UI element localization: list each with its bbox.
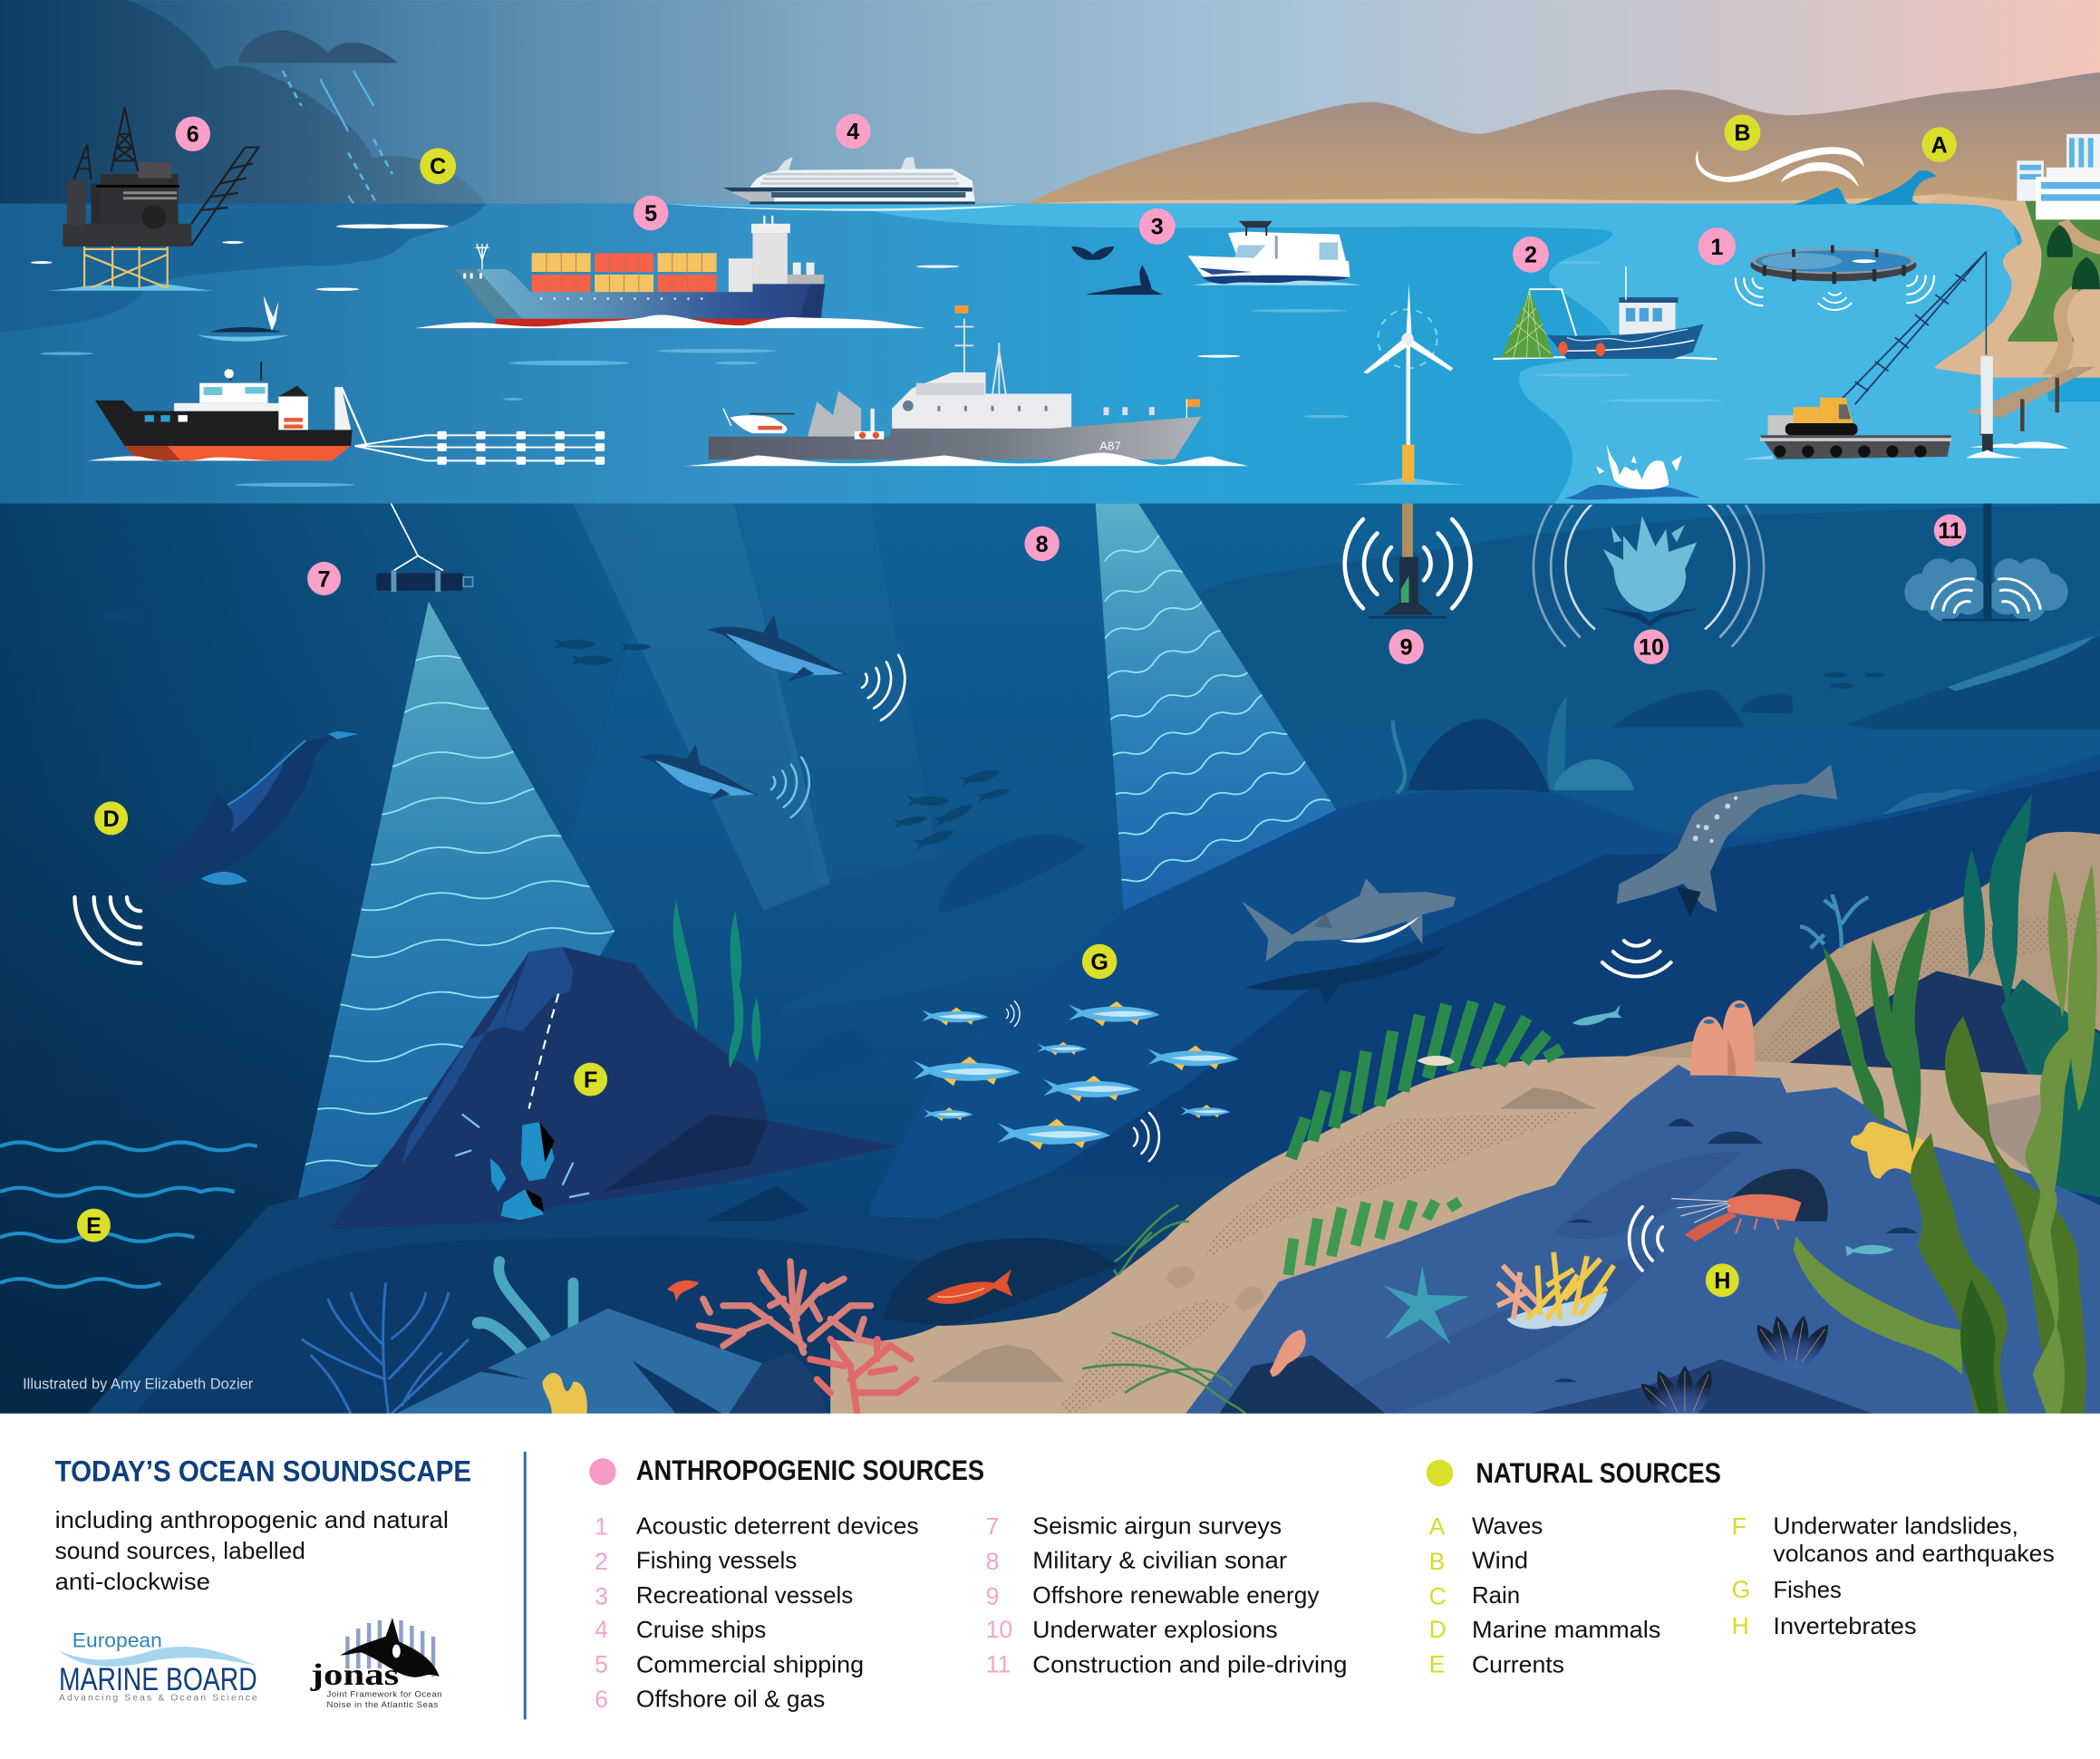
anthropogenic sources legend: 7 xyxy=(986,1513,999,1540)
logo: JONAS: jonas xyxy=(310,1658,399,1692)
marker E xyxy=(77,1209,111,1242)
natural sources legend: C xyxy=(1429,1582,1447,1609)
natural sources legend: D xyxy=(1429,1616,1447,1643)
small teal fish xyxy=(1845,1245,1893,1256)
marker B xyxy=(1725,114,1760,150)
dolphin lower xyxy=(639,744,759,801)
marker 10: 10 xyxy=(1639,635,1664,661)
anthropogenic sources legend: Fishing vessels xyxy=(636,1548,797,1573)
source 10: underwater explosion xyxy=(1532,505,1766,647)
small red fish xyxy=(667,1281,699,1301)
seagrass fan upper xyxy=(1291,1001,1562,1158)
main sand dune xyxy=(830,1057,2049,1414)
shrimp xyxy=(1671,1194,1801,1242)
beach strip xyxy=(1024,194,2009,214)
marker C xyxy=(420,148,456,184)
natural sources legend: Rain xyxy=(1472,1583,1520,1609)
source 7: seismic pulse beam xyxy=(297,602,615,1198)
legend intro xyxy=(55,1508,449,1595)
rain puddles xyxy=(336,224,449,228)
marker B: B xyxy=(1734,121,1751,146)
natural sources legend: H xyxy=(1732,1612,1749,1639)
anthropogenic sources legend: Military & civilian sonar xyxy=(1032,1548,1287,1573)
whale tail and fin xyxy=(1071,246,1163,295)
marker 3 xyxy=(1139,208,1176,245)
anthropogenic sources legend: Seismic airgun surveys xyxy=(1032,1514,1282,1540)
marker 5: 5 xyxy=(644,201,657,227)
whale sound waves xyxy=(61,871,167,977)
marker 9: 9 xyxy=(1400,635,1413,661)
marker G: G xyxy=(1090,950,1108,975)
distant rocks xyxy=(1612,690,1794,727)
logo: European Marine Board: Advancing Seas & Ocean Science xyxy=(59,1694,257,1704)
source 6: offshore oil and gas platform xyxy=(47,107,258,291)
marker 7 xyxy=(307,562,341,595)
marker G xyxy=(1082,944,1117,979)
source 1: fish cage with deterrent device xyxy=(1730,245,1940,311)
dolphin lower sound waves xyxy=(767,753,814,819)
source E: currents xyxy=(0,1142,257,1287)
surface splash xyxy=(1564,445,1701,499)
marker E: E xyxy=(86,1213,102,1239)
marker 5 xyxy=(634,196,668,230)
reef bumps xyxy=(1553,1119,1918,1382)
source B: wind swirl xyxy=(1696,147,1864,188)
anthropogenic sources legend: 3 xyxy=(595,1582,608,1609)
legend intro: anti-clockwise xyxy=(55,1570,210,1595)
source A: breaking waves xyxy=(1792,170,1937,205)
blue reef xyxy=(1185,1065,2100,1414)
source 7: airgun array xyxy=(376,504,473,592)
lower seabed band xyxy=(936,770,2100,1414)
airgun streamers xyxy=(355,431,605,465)
marker 1 xyxy=(1698,227,1736,266)
source 9: turbine foundation with sound xyxy=(1345,504,1470,617)
source 5: container ship xyxy=(415,216,925,328)
foreground blue rock xyxy=(395,1309,827,1414)
source 8: naval research vessel: A87 xyxy=(1099,440,1121,453)
reef cave xyxy=(1727,1169,1828,1222)
marker 3: 3 xyxy=(1151,215,1164,240)
mussels lower cluster xyxy=(1635,1366,1718,1426)
marker 11 xyxy=(1934,514,1966,546)
marker 1: 1 xyxy=(1710,235,1723,260)
anthropogenic sources legend: ANTHROPOGENIC SOURCES xyxy=(636,1455,984,1486)
marker 10 xyxy=(1634,630,1669,664)
teal rock xyxy=(2001,979,2100,1197)
source 11: construction barge and crane xyxy=(1741,252,2022,459)
distant fish silhouettes xyxy=(102,607,1886,851)
anthropogenic sources legend: 9 xyxy=(986,1582,999,1609)
anthropogenic sources legend: 2 xyxy=(595,1548,608,1575)
teal fish on slope xyxy=(1573,1004,1621,1025)
deep water xyxy=(0,504,2100,1414)
sand rock xyxy=(931,1345,1065,1382)
natural sources legend: Marine mammals xyxy=(1472,1618,1660,1643)
anthropogenic sources legend: Acoustic deterrent devices xyxy=(636,1514,919,1540)
rain xyxy=(283,71,392,225)
shoal of fish xyxy=(914,1001,1239,1150)
marker H: H xyxy=(1714,1269,1730,1294)
yellow sponge small xyxy=(542,1373,587,1414)
natural sources legend: Wind xyxy=(1472,1548,1528,1573)
whitecaps xyxy=(31,241,1240,358)
marker F xyxy=(574,1063,607,1097)
anthropogenic sources legend: Construction and pile-driving xyxy=(1032,1653,1348,1678)
divider xyxy=(524,1452,527,1719)
logo: European Marine Board: MARINE BOARD xyxy=(59,1661,257,1697)
sea surface xyxy=(0,204,2100,505)
anthropogenic sources legend: 4 xyxy=(595,1616,608,1643)
red fish xyxy=(927,1270,1012,1304)
seafloor foreground xyxy=(134,1205,1286,1414)
striped rock fans xyxy=(777,835,1088,1087)
anthropogenic sources legend: Offshore renewable energy xyxy=(1032,1583,1320,1609)
marker A: A xyxy=(1931,132,1948,158)
natural sources legend: Fishes xyxy=(1773,1578,1842,1603)
natural sources legend: G xyxy=(1732,1576,1750,1603)
natural sources legend: volcanos and earthquakes xyxy=(1773,1542,2055,1567)
pilot whale xyxy=(148,731,362,894)
logo: JONAS: Joint Framework for Ocean xyxy=(327,1689,442,1699)
legend panel xyxy=(0,1414,2100,1759)
legend intro: including anthropogenic and natural xyxy=(55,1508,449,1533)
marker 6: 6 xyxy=(187,122,199,148)
teal tube worms xyxy=(479,1261,573,1362)
left blue coral xyxy=(301,1283,469,1414)
seal sound waves xyxy=(1602,941,1671,977)
logo: JONAS xyxy=(310,1618,442,1710)
anthropogenic sources legend: 8 xyxy=(986,1548,999,1575)
storm cloud xyxy=(0,0,486,205)
pink tube sponges xyxy=(1690,1000,1755,1076)
natural sources legend xyxy=(1427,1457,2055,1678)
large rock with landslide xyxy=(328,947,896,1230)
mid seabed layer xyxy=(857,754,2100,1414)
marker F: F xyxy=(584,1068,597,1093)
reef foreground rock xyxy=(1527,1359,1875,1414)
marker 2: 2 xyxy=(1524,243,1537,268)
coast and beach xyxy=(1929,194,2100,378)
background slopes xyxy=(777,504,2100,1011)
natural sources legend: Invertebrates xyxy=(1773,1614,1917,1639)
marker 8 xyxy=(1024,527,1060,561)
logo: European Marine Board: European xyxy=(73,1629,162,1652)
logo: JONAS: Noise in the Atlantic Seas xyxy=(327,1700,438,1710)
dolphin upper sound waves xyxy=(856,648,912,724)
small sand scallops xyxy=(1166,1266,1264,1312)
marker D xyxy=(94,801,128,835)
seagrass fan lower xyxy=(1289,1202,1460,1275)
yellow sponge xyxy=(1851,1122,1935,1178)
logo: European Marine Board xyxy=(59,1629,257,1704)
legend title: TODAY’S OCEAN SOUNDSCAPE xyxy=(55,1455,471,1487)
kelp forest xyxy=(1794,794,2097,1414)
marker 9 xyxy=(1389,630,1424,664)
coastal buildings xyxy=(2017,134,2100,219)
pink coral xyxy=(699,1261,916,1414)
marker 7: 7 xyxy=(318,566,331,592)
marker 6 xyxy=(176,117,210,151)
sea highlights xyxy=(40,261,1724,487)
small pale fish xyxy=(1411,1056,1455,1066)
legend intro: sound sources, labelled xyxy=(55,1539,305,1564)
wind turbine xyxy=(1352,284,1466,485)
source 8: military sonar beam xyxy=(1095,504,1336,911)
lower left deep shadow xyxy=(0,804,536,1414)
pink sponge xyxy=(1270,1329,1306,1377)
distant hills xyxy=(1024,72,2100,205)
coastal road xyxy=(2042,219,2100,375)
natural sources legend: B xyxy=(1429,1548,1445,1575)
jetty xyxy=(1968,367,2095,449)
marker H xyxy=(1706,1263,1739,1297)
natural sources legend: F xyxy=(1732,1513,1747,1540)
mussels upper cluster xyxy=(1750,1314,1835,1374)
marker 8: 8 xyxy=(1036,532,1049,557)
anthropogenic sources legend: Cruise ships xyxy=(636,1618,766,1643)
seagrass on sand xyxy=(1082,1205,1245,1414)
seal xyxy=(1617,765,1837,917)
anthropogenic sources legend: Commercial shipping xyxy=(636,1653,864,1678)
source 4: cruise ship xyxy=(663,157,1018,211)
source 11: pile-driving bubble curtain xyxy=(1904,504,2068,622)
source 3: recreational vessel xyxy=(1188,221,1362,285)
marker D: D xyxy=(103,807,120,832)
green land xyxy=(2008,201,2100,342)
credit line: Illustrated by Amy Elizabeth Dozier xyxy=(23,1376,254,1392)
spouting whale xyxy=(197,296,289,342)
anthropogenic sources legend: 11 xyxy=(986,1651,1011,1678)
sky xyxy=(0,0,2100,205)
marker C: C xyxy=(430,154,446,179)
cloud reflection on water xyxy=(0,204,486,332)
branching coral on slope xyxy=(1800,894,1868,948)
marker 4 xyxy=(836,114,870,149)
marker 11: 11 xyxy=(1938,518,1962,544)
dark mound on seabed xyxy=(884,1238,1118,1326)
anthropogenic sources legend: 10 xyxy=(986,1616,1012,1643)
dark sand bottom rock xyxy=(1219,1355,1386,1414)
distant bushes xyxy=(1873,784,2068,819)
source 7: seismic survey vessel xyxy=(87,362,367,461)
fish sound waves xyxy=(1006,1001,1159,1161)
natural sources legend: Underwater landslides, xyxy=(1773,1514,2018,1540)
source 8: naval research vessel xyxy=(683,305,1248,466)
coastal trees xyxy=(2047,225,2100,289)
seafloor left slope xyxy=(87,1172,1286,1414)
marker 4: 4 xyxy=(847,120,859,145)
natural sources legend: A xyxy=(1429,1513,1446,1540)
starfish xyxy=(1383,1265,1469,1345)
seabed mound with seaweed xyxy=(1393,696,1634,793)
anthropogenic sources legend: Underwater explosions xyxy=(1032,1618,1278,1643)
natural sources legend: Currents xyxy=(1472,1653,1564,1678)
dark rock behind blue reef xyxy=(1769,971,2100,1077)
dolphin upper xyxy=(707,614,847,681)
anthropogenic sources legend: 5 xyxy=(595,1651,608,1678)
small seabed rock xyxy=(706,1185,810,1222)
source 2: fishing vessel xyxy=(1494,266,1717,359)
anthropogenic sources legend xyxy=(589,1455,1348,1713)
yellow coral xyxy=(1497,1252,1614,1329)
left deep shadow xyxy=(0,504,670,1414)
seagrass behind the rock xyxy=(673,900,760,1068)
anthropogenic sources legend: Recreational vessels xyxy=(636,1583,853,1609)
natural sources legend: E xyxy=(1429,1651,1445,1678)
small dark cloud xyxy=(238,31,398,63)
upper sand slope xyxy=(1626,832,2100,1112)
natural sources legend: Waves xyxy=(1472,1514,1543,1540)
light rays xyxy=(573,504,937,911)
anthropogenic sources legend: 1 xyxy=(595,1513,608,1540)
marker 2 xyxy=(1513,237,1549,273)
anthropogenic sources legend: Offshore oil & gas xyxy=(636,1687,825,1712)
natural sources legend: NATURAL SOURCES xyxy=(1476,1457,1721,1489)
marker A xyxy=(1921,127,1957,162)
shallow bay xyxy=(663,204,2100,505)
shrimp sound waves xyxy=(1630,1207,1662,1271)
anthropogenic sources legend: 6 xyxy=(595,1686,608,1713)
shark xyxy=(1242,878,1456,1004)
